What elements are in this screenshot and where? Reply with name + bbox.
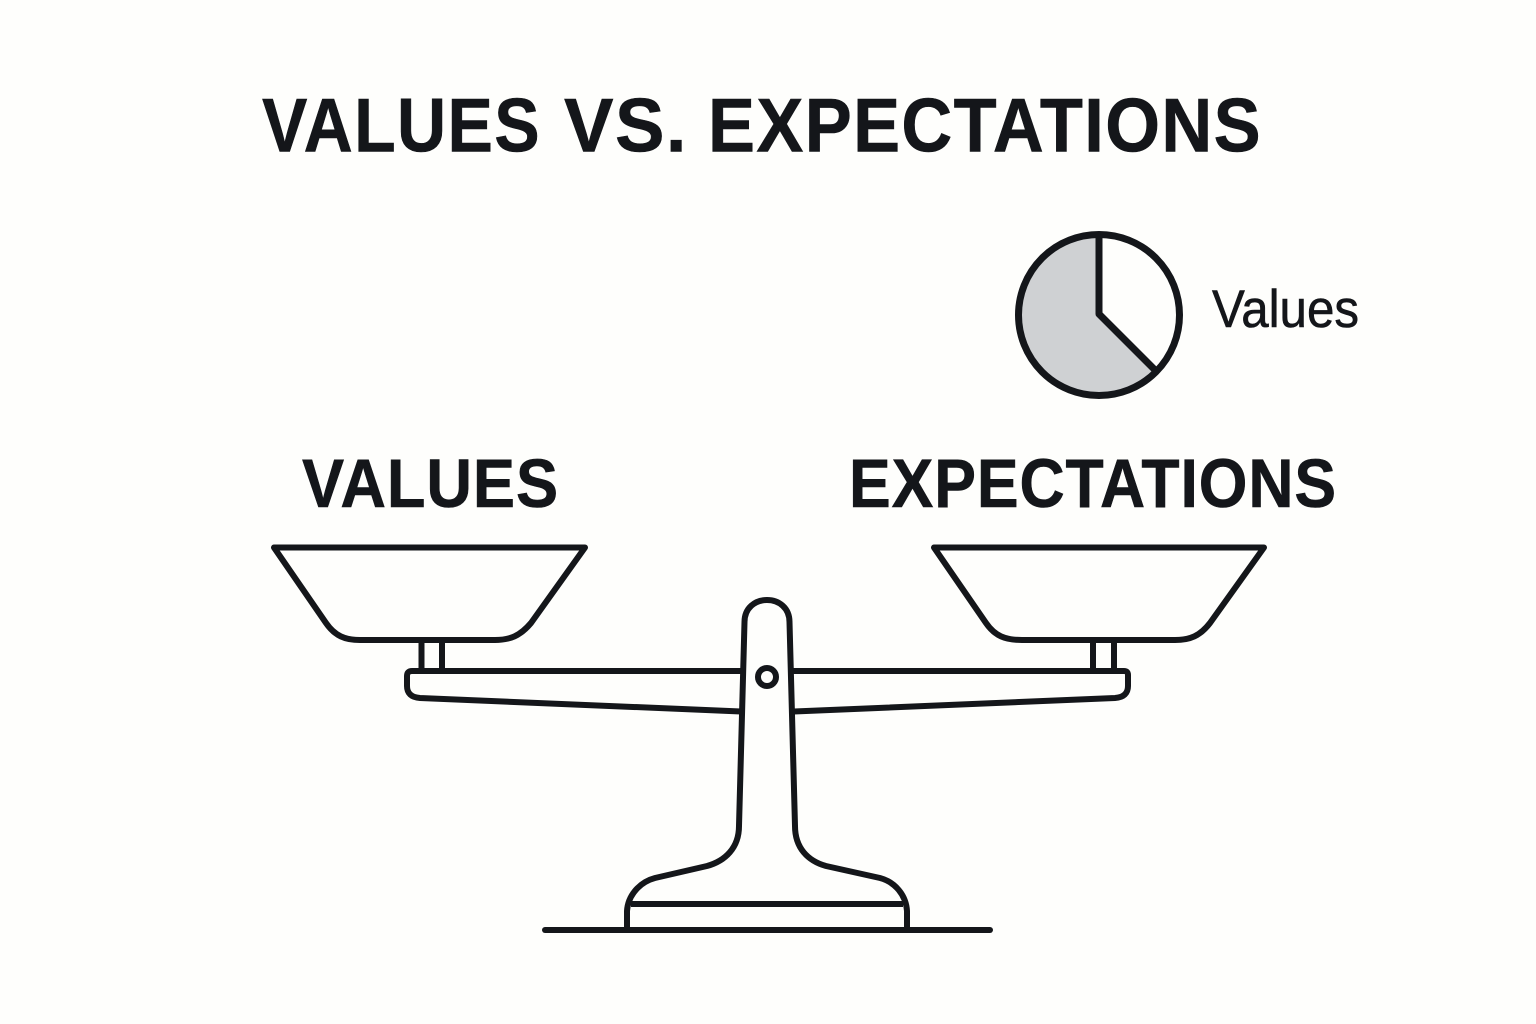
right pan heading: EXPECTATIONS [849,445,1337,522]
right pan [934,548,1264,640]
ground line [545,927,990,933]
left pan heading: VALUES [302,445,559,522]
right pan supports [1093,641,1114,670]
right beam arm [793,671,1128,712]
title: VS. [564,84,688,168]
base plate line [631,901,903,907]
title: VALUES [262,84,541,168]
title: EXPECTATIONS [708,84,1262,168]
title [262,84,1262,168]
balance scale [274,548,1264,930]
left pan supports [422,641,442,670]
central post and base [627,600,907,927]
icon: pie chart [1018,234,1180,396]
left beam arm [407,671,741,712]
left pan [274,548,585,640]
pie chart label: Values [1212,280,1359,339]
pivot [758,668,776,686]
